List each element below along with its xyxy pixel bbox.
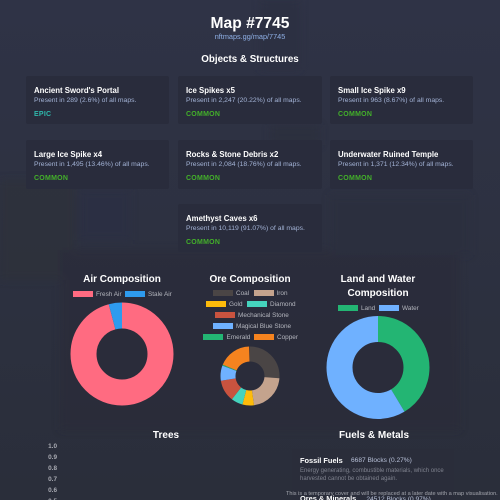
cover notice: This is a temporary cover and will be replaced at a later date with a map visualisation.: [286, 491, 498, 497]
legend: land and water: [338, 304, 419, 312]
card: Rocks and Stone Debris: [178, 140, 322, 189]
card: Small Ice Spike: Present in 963 (8.67%) of all maps.: [338, 97, 444, 104]
legend: air: [73, 290, 172, 298]
heading: objects and structures: Objects & Structures: [201, 54, 299, 65]
card: Large Ice Spike: [26, 140, 169, 189]
card: Ice Spikes: Ice Spikes x5: [186, 86, 235, 94]
card: Rocks and Stone Debris: COMMON: [186, 174, 220, 182]
card: Rocks and Stone Debris: Present in 2,084 (18.76%) of all maps.: [186, 161, 302, 168]
legend: ore: [203, 290, 298, 340]
chart axis: trees: 1.0: [48, 443, 57, 450]
card: Large Ice Spike: COMMON: [34, 174, 68, 182]
fossil fuels description: harvested cannot be obtained again.: [300, 476, 397, 482]
card: Amethyst Caves: Present in 10,119 (91.07%) of all maps.: [186, 225, 305, 232]
legend: air: Fresh Air: [96, 290, 122, 298]
card: Ice Spikes: [178, 76, 322, 124]
card: Large Ice Spike: Large Ice Spike x4: [34, 150, 102, 158]
map link: nftmaps.gg/map/7745: [215, 32, 285, 41]
legend: ore: Mechanical Stone: [238, 312, 289, 318]
heading: land and water composition: Composition: [347, 288, 409, 299]
chart axis: trees: [48, 443, 57, 500]
card: Underwater Ruined Temple: Underwater Ruined Temple: [338, 150, 438, 158]
heading: ore composition: Ore Composition: [209, 274, 291, 285]
card: Ancient Sword's Portal: Present in 289 (2.6%) of all maps.: [34, 97, 136, 104]
card: Underwater Ruined Temple: COMMON: [338, 174, 372, 182]
panel: fossil fuels: [292, 449, 454, 500]
card: Amethyst Caves: Amethyst Caves x6: [186, 214, 258, 222]
card: Ancient Sword's Portal: EPIC: [34, 110, 51, 118]
fossil fuels description: [300, 468, 444, 482]
legend: ore: Magical Blue Stone: [236, 322, 291, 330]
heading: land and water composition: Land and Water: [341, 274, 415, 285]
legend: ore: Diamond: [270, 300, 296, 308]
card: Underwater Ruined Temple: Present in 1,371 (12.34%) of all maps.: [338, 161, 454, 168]
legend: ore: Gold: [229, 300, 242, 308]
fossil fuels count: 6687 Blocks (0.27%): [351, 457, 412, 464]
card: Ancient Sword's Portal: [26, 76, 169, 124]
card: Small Ice Spike: [330, 76, 473, 124]
legend: ore: Iron: [276, 290, 288, 296]
legend: land and water: Land: [361, 304, 375, 312]
chart axis: trees: 0.9: [48, 454, 57, 461]
card: Ice Spikes: COMMON: [186, 110, 220, 118]
card: Amethyst Caves: COMMON: [186, 238, 220, 246]
card: Small Ice Spike: Small Ice Spike x9: [338, 86, 406, 94]
heading: fuels and metals: Fuels & Metals: [339, 430, 409, 441]
heading: land and water composition: [341, 274, 416, 299]
chart axis: trees: 0.7: [48, 476, 57, 483]
legend: air: Stale Air: [148, 290, 172, 298]
title: Map #7745: [211, 15, 289, 32]
card: Ancient Sword's Portal: Ancient Sword's Portal: [34, 86, 119, 94]
chart axis: trees: 0.6: [48, 487, 57, 494]
legend: ore: Emerald: [226, 334, 250, 340]
donut chart: land and water: [326, 316, 430, 419]
card: Amethyst Caves: [178, 204, 322, 252]
heading: trees: Trees: [153, 430, 179, 441]
fossil fuels heading: Fossil Fuels: [300, 456, 343, 465]
legend: ore: Copper: [277, 334, 298, 340]
card: Ice Spikes: Present in 2,247 (20.22%) of all maps.: [186, 97, 302, 104]
chart axis: trees: 0.8: [48, 465, 57, 472]
donut chart: air: [70, 302, 174, 406]
donut chart: ore: [220, 346, 280, 406]
fossil fuels description: Energy generating, combustible materials, which once: [300, 468, 444, 474]
legend: ore: Coal: [236, 290, 249, 296]
legend: land and water: Water: [402, 304, 419, 312]
card: Small Ice Spike: COMMON: [338, 110, 372, 118]
card: Rocks and Stone Debris: Rocks & Stone Debris x2: [186, 150, 278, 158]
card: Large Ice Spike: Present in 1,495 (13.46%) of all maps.: [34, 161, 150, 168]
card: Underwater Ruined Temple: [330, 140, 473, 189]
heading: air composition: Air Composition: [83, 274, 161, 285]
